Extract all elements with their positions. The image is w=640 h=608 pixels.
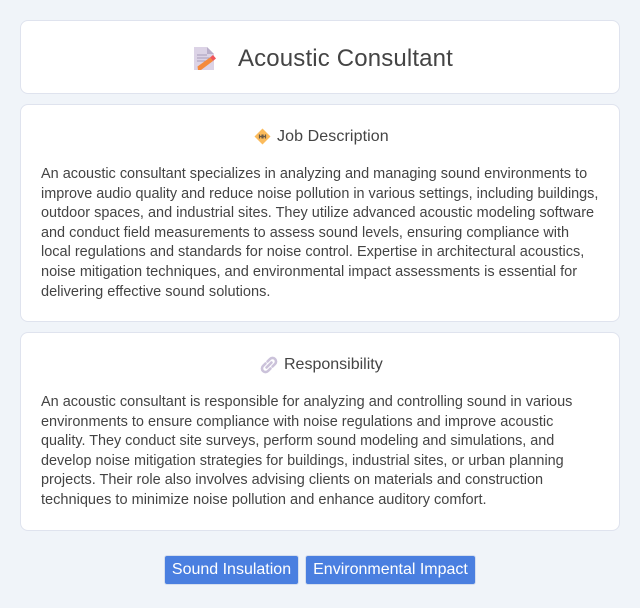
text block: job description — [41, 166, 598, 300]
text block: responsibility: quality. They conduct site surveys, perform sound modeling and simulations, and — [41, 433, 554, 449]
text block: responsibility: develop noise mitigation strategies for buildings, industrial sites, or urban planning — [41, 453, 564, 469]
text block: responsibility: projects. Their role also involves advising clients on materials and construction — [41, 472, 543, 488]
tag: environmental impact — [305, 555, 476, 585]
text block: job description: noise mitigation techniques, and environmental impact assessments is essential for — [41, 264, 577, 280]
text block: job description: delivering effective sound solutions. — [41, 284, 270, 300]
icon: diamond road sign — [254, 128, 270, 144]
icon: chain link — [260, 356, 278, 374]
text block: responsibility: environments to ensure compliance with noise regulations and improve acoustic — [41, 414, 553, 430]
heading: responsibility: Responsibility — [284, 356, 383, 373]
tag: sound insulation: Sound Insulation — [172, 561, 291, 578]
title: Acoustic Consultant — [238, 45, 453, 72]
tag: sound insulation — [164, 555, 299, 585]
text block: job description: outdoor spaces, and industrial sites. They utilize advanced acoustic modeling software — [41, 205, 594, 221]
panel: job description — [20, 104, 620, 322]
text block: responsibility: An acoustic consultant is responsible for analyzing and controlling sound in various — [41, 394, 572, 410]
text block: job description: improve audio quality and reduce noise pollution in various settings, including buildings, — [41, 186, 598, 202]
text block: job description: An acoustic consultant specializes in analyzing and managing sound environments to — [41, 166, 587, 182]
heading: job description: Job Description — [277, 128, 389, 145]
text block: responsibility — [41, 394, 572, 508]
tag: environmental impact: Environmental Impact — [313, 561, 468, 578]
panel: responsibility — [20, 332, 620, 531]
text block: job description: local regulations and standards for noise control. Expertise in architectural acoustics, — [41, 244, 584, 260]
icon: document with pencil — [194, 47, 216, 70]
panel: title card — [20, 20, 620, 94]
text block: job description: and conduct field measurements to assess sound levels, ensuring compliance with — [41, 225, 569, 241]
text block: responsibility: techniques to minimize noise pollution and enhance auditory comfort. — [41, 492, 487, 508]
